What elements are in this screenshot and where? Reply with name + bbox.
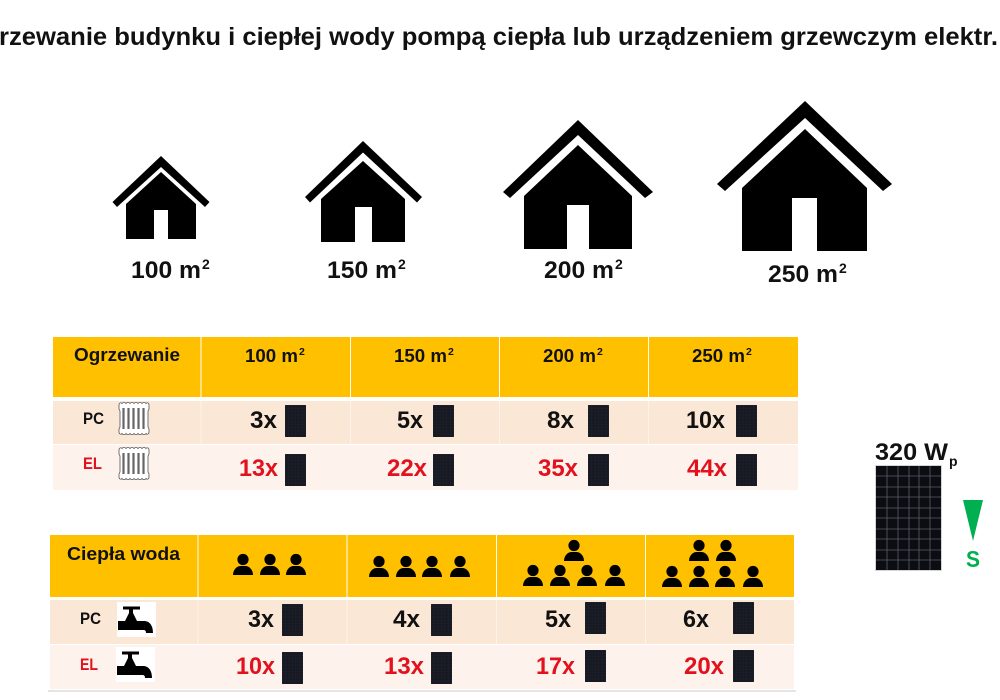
row EL: 13x [239, 455, 279, 482]
icon: 4 people [369, 556, 470, 577]
label: 2 [202, 256, 210, 272]
row PC: 3x [248, 606, 275, 633]
row PC: 3x [250, 407, 278, 434]
row EL: 44x [687, 455, 728, 482]
header row: Ciepła woda [67, 544, 181, 564]
body [126, 172, 196, 239]
solar panel 320 Wp [875, 439, 958, 571]
header row: 100 m [245, 346, 298, 366]
row EL: 22x [387, 455, 428, 482]
table: Ciepła woda [48, 535, 796, 692]
row EL: 17x [536, 653, 576, 680]
label: 200 m [544, 257, 614, 284]
row PC: PC [83, 409, 104, 428]
row EL [53, 445, 798, 490]
body [321, 161, 405, 242]
row PC: 4x [393, 606, 421, 633]
table: Ogrzewanie [53, 337, 798, 490]
row EL [48, 645, 796, 692]
row PC [50, 600, 794, 644]
row EL: EL [80, 655, 98, 674]
header row: 200 m [543, 346, 596, 366]
header row [53, 337, 798, 397]
header row: 2 [299, 346, 305, 358]
row PC: 10x [686, 407, 726, 434]
header row: 2 [746, 346, 752, 358]
row PC: 5x [545, 606, 572, 633]
row EL: 20x [684, 653, 725, 680]
row PC: 6x [683, 606, 710, 633]
icon: 3 people [233, 554, 306, 575]
icon: 5 people [523, 540, 625, 586]
label: 250 m [768, 261, 838, 288]
roof [717, 101, 892, 191]
header row: Ogrzewanie [74, 345, 180, 365]
title: rzewanie budynku i ciepłej wody pompą ciepła lub urządzeniem grzewczym elektr. [0, 23, 998, 51]
header row: 150 m [394, 346, 447, 366]
row PC: 5x [397, 407, 424, 434]
body [742, 129, 867, 251]
roof [112, 156, 210, 207]
house 150 m2 [305, 141, 422, 284]
row PC [53, 401, 798, 444]
label: 100 m [131, 257, 201, 284]
roof [305, 141, 422, 202]
header row: 250 m [692, 346, 745, 366]
row PC: PC [80, 609, 101, 628]
south direction arrow: S [966, 546, 980, 572]
row PC: 8x [547, 407, 575, 434]
header row: 2 [597, 346, 603, 358]
house 100 m2 [112, 156, 210, 284]
panel graphic [875, 465, 942, 571]
label: 2 [839, 260, 847, 276]
label: 320 W [875, 439, 948, 466]
roof [503, 120, 653, 198]
label: 2 [398, 256, 406, 272]
icon: 6 people [662, 540, 763, 587]
label: 150 m [327, 257, 397, 284]
label: 2 [615, 256, 623, 272]
house 200 m2 [503, 120, 653, 284]
row EL: EL [83, 454, 102, 473]
row EL: 13x [384, 653, 425, 680]
header row [50, 535, 794, 597]
label: p [949, 453, 958, 469]
body [524, 145, 632, 249]
header row: 2 [448, 346, 454, 358]
south direction arrow [963, 500, 983, 572]
house 250 m2 [717, 101, 892, 288]
row EL: 10x [236, 653, 276, 680]
row EL: 35x [538, 455, 579, 482]
